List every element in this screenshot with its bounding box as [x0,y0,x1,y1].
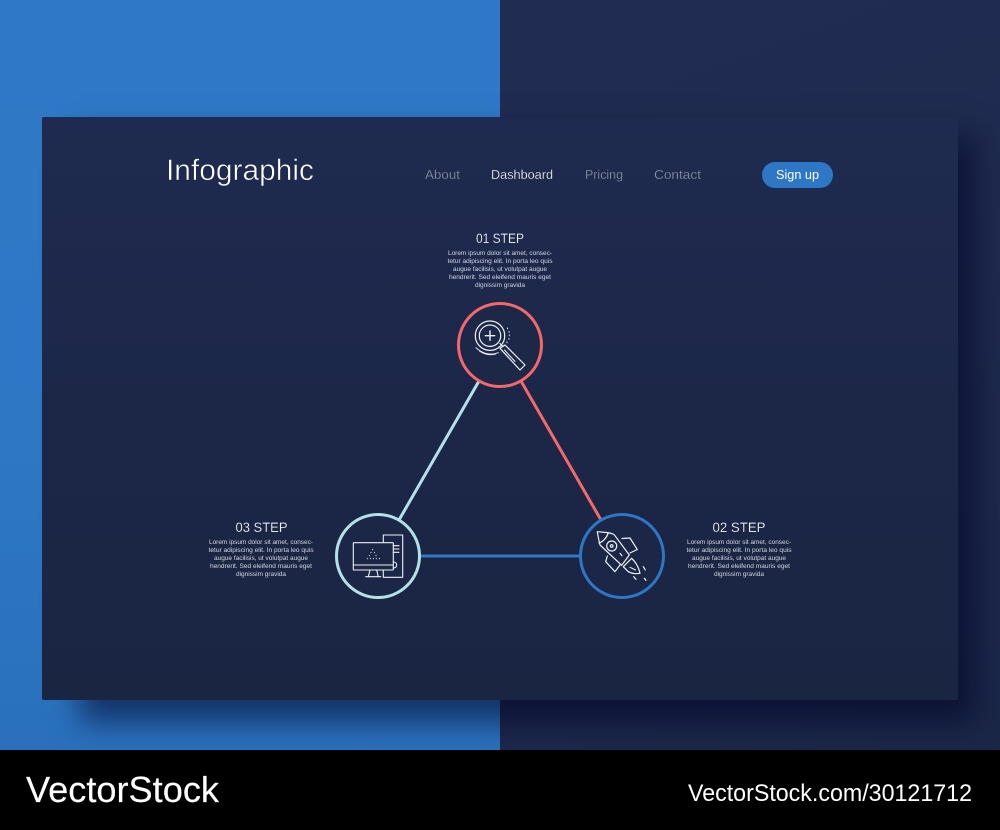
connector: step 3 to step 1 [399,381,479,520]
nav: Dashboard: Dashboard [491,167,553,182]
step 1 body: augue facilisis, ut volutpat augue [453,266,548,273]
background: blue left half [0,0,500,750]
step 1 heading: 01 STEP [476,230,524,246]
step 1 node: magnifier [458,304,542,386]
connector: step 1 to step 2 [521,381,601,520]
background: navy right half [500,0,1000,750]
step 3 body: tetur adipiscing elit. In porta leo quis [208,547,314,554]
panel: main card [42,117,958,700]
nav: Pricing: Pricing [585,167,623,182]
step 3 node: computer [336,514,420,598]
icon: rocket [597,532,646,580]
step 1 body [448,250,552,289]
step 1 body: tetur adipiscing elit. In porta leo quis [448,258,552,265]
step 1 text [448,230,552,289]
watermark bar [0,750,1000,830]
step 3 body: augue facilisis, ut volutpat augue [214,555,309,562]
watermark: VectorStock logo: VectorStock [26,769,220,810]
step 3 body: Lorem ipsum dolor sit amet, consec- [209,539,313,546]
step 1 body: hendrerit. Sed eleifend mauris eget [449,274,551,281]
step 2 node: rocket [580,514,664,598]
step 2 heading: 02 STEP [712,519,766,535]
icon: magnifying glass [475,321,525,370]
nav: Contact: Contact [654,167,701,182]
step 3 body: hendrerit. Sed eleifend mauris eget [210,563,312,570]
step 2 text [686,519,792,578]
step 3 text [208,519,314,578]
connector: step 2 to step 3 [420,554,580,558]
navigation menu [425,167,701,182]
step 3 body: dignissim gravida [236,571,287,578]
step 1 body: dignissim gravida [475,282,526,289]
nav: About: About [425,167,460,182]
step 3 heading: 03 STEP [236,519,288,535]
step 2 body: hendrerit. Sed eleifend mauris eget [688,563,790,570]
step 2 body: Lorem ipsum dolor sit amet, consec- [687,539,791,546]
step 2 body: dignissim gravida [714,571,765,578]
step 3 body [208,539,314,578]
watermark: image URL: VectorStock.com/30121712 [688,780,972,807]
sign up button [762,162,833,188]
sign up button: Sign up [776,167,819,182]
step 1 body: Lorem ipsum dolor sit amet, consec- [448,250,552,257]
step 2 body [686,539,792,578]
title: Infographic [166,154,314,187]
icon: desktop computer [353,535,403,577]
step 2 body: tetur adipiscing elit. In porta leo quis [686,547,792,554]
step 2 body: augue facilisis, ut volutpat augue [692,555,787,562]
